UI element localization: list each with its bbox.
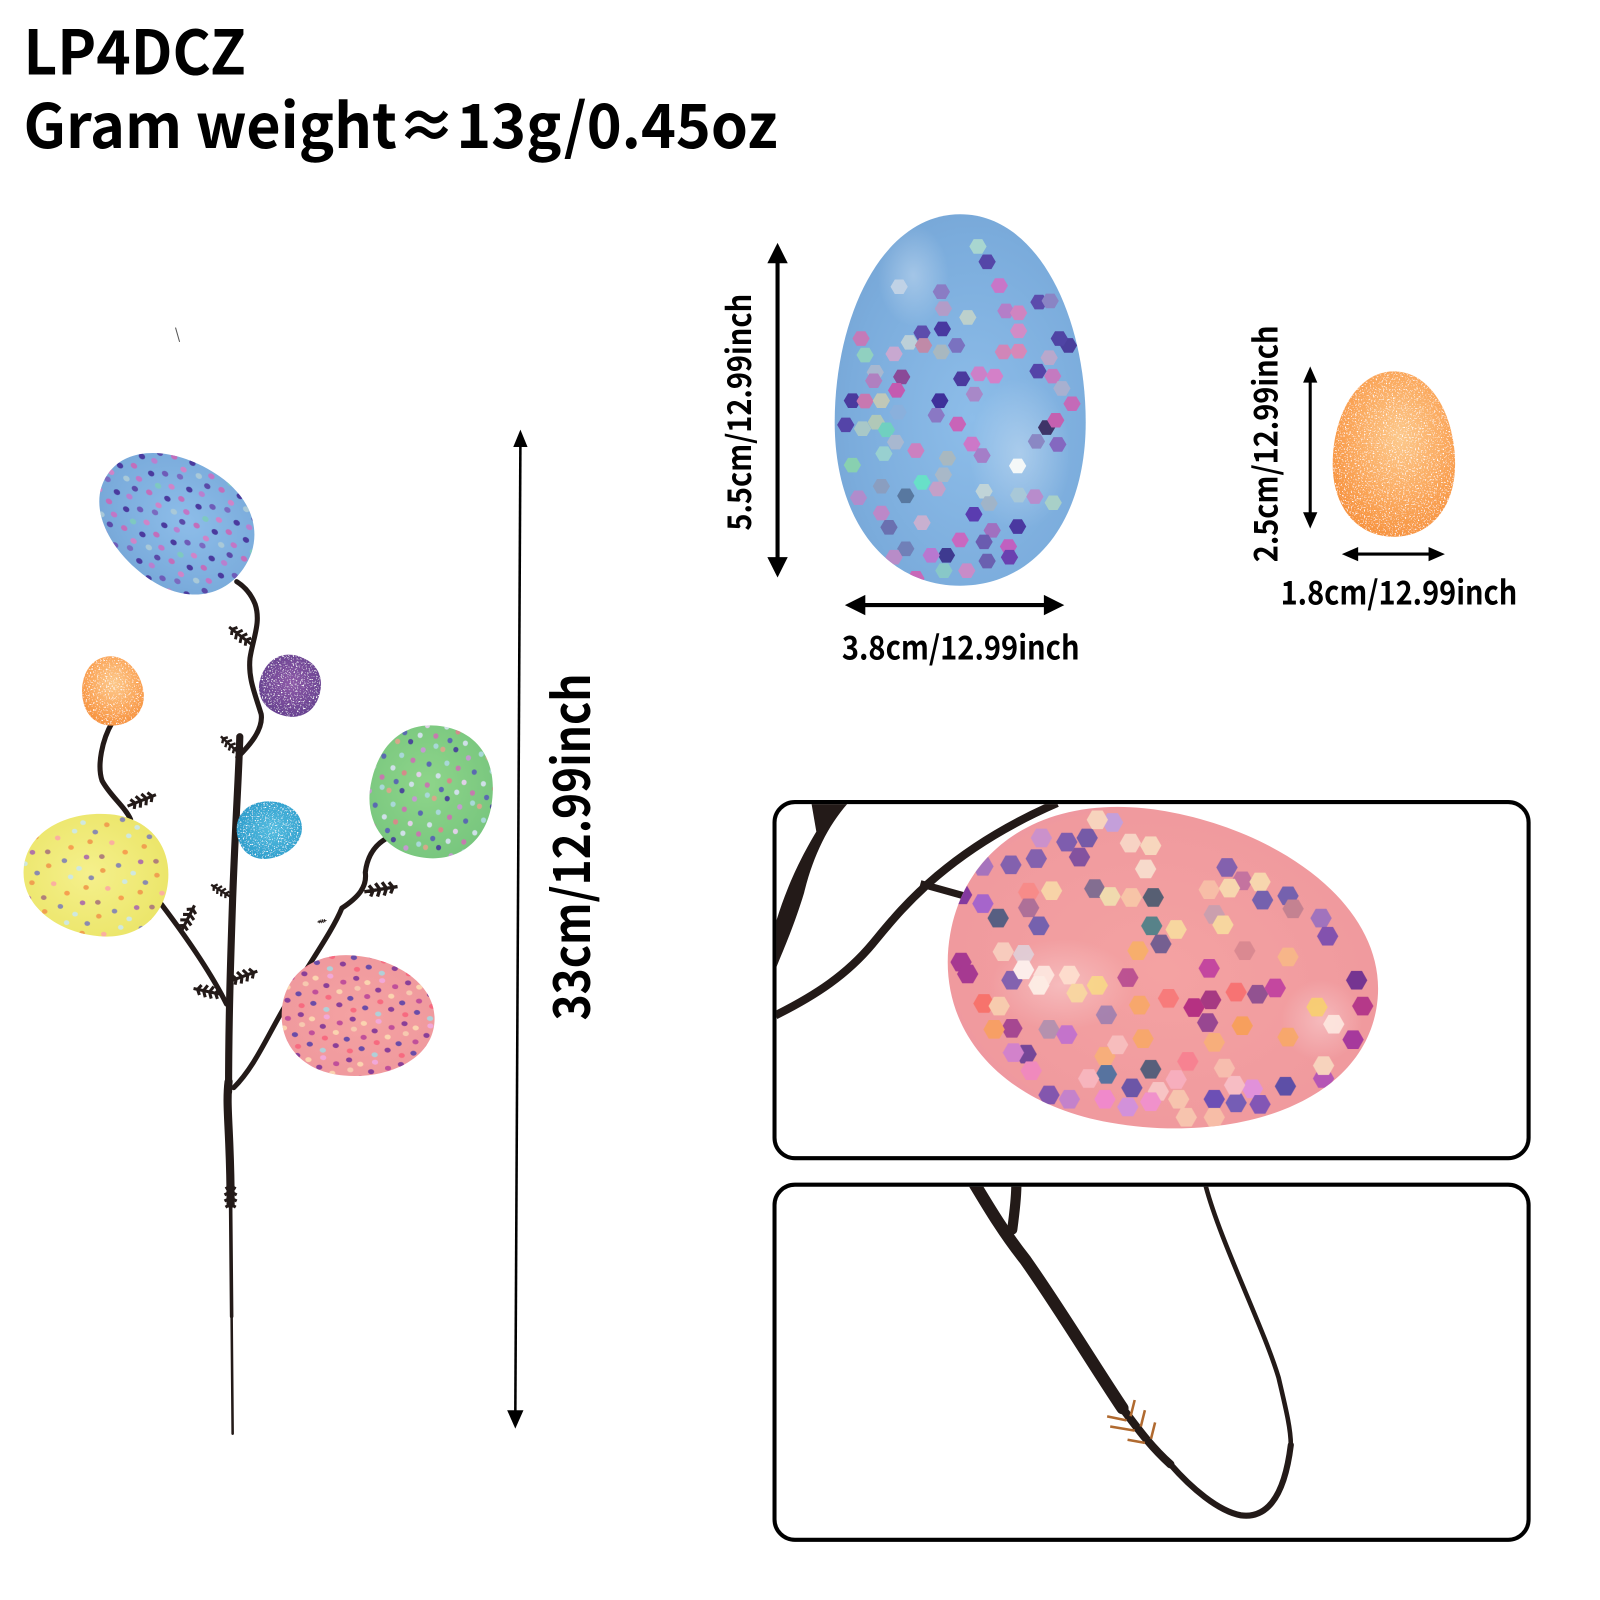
title: product code: LP4DCZ <box>23 3 246 92</box>
arrow: small egg height <box>1303 366 1317 529</box>
arrow: total height <box>507 430 528 1429</box>
egg: green sequin <box>360 716 503 868</box>
close-up branches <box>776 802 1057 1015</box>
panel: stem hook close-up <box>774 1184 1529 1540</box>
close-up egg sequins <box>950 811 1373 1127</box>
label: small egg height: 2.5cm/12.99inch <box>1241 326 1288 562</box>
panel: pink egg close-up <box>774 778 1529 1165</box>
egg: teal glitter <box>232 796 307 863</box>
small orange egg <box>1333 371 1455 537</box>
speck mark <box>176 328 180 342</box>
label: small egg width: 1.8cm/12.99inch <box>1281 568 1517 615</box>
close-up egg highlights <box>1011 952 1350 1050</box>
label: large egg height: 5.5cm/12.99inch <box>714 294 761 531</box>
large egg sequins <box>837 239 1081 586</box>
large blue egg <box>835 214 1086 586</box>
branch thorns <box>125 622 399 1212</box>
egg: pink sequin on branch <box>277 950 440 1083</box>
heading: gram weight: Gram weight≈13g/0.45oz <box>23 77 778 166</box>
egg: purple glitter <box>251 646 330 725</box>
arrow: large egg height <box>767 243 788 578</box>
label: large egg width: 3.8cm/12.99inch <box>842 623 1080 670</box>
egg: blue sequin on branch <box>72 423 279 620</box>
branch stems <box>100 582 386 1434</box>
label: total height: 33cm/12.99inch <box>531 673 605 1020</box>
close-up pink egg <box>948 806 1378 1128</box>
hook stem <box>974 1184 1291 1516</box>
panel 2 border <box>774 1185 1529 1540</box>
product photo: egg branch <box>18 423 503 1434</box>
orange thorns <box>1107 1400 1155 1443</box>
large egg highlights <box>878 224 1071 531</box>
arrow: small egg width <box>1342 547 1445 561</box>
egg: orange glitter on branch <box>75 651 149 731</box>
arrow: large egg width <box>845 595 1064 615</box>
panel 1 border <box>774 802 1529 1158</box>
egg: yellow sequin <box>18 807 173 942</box>
